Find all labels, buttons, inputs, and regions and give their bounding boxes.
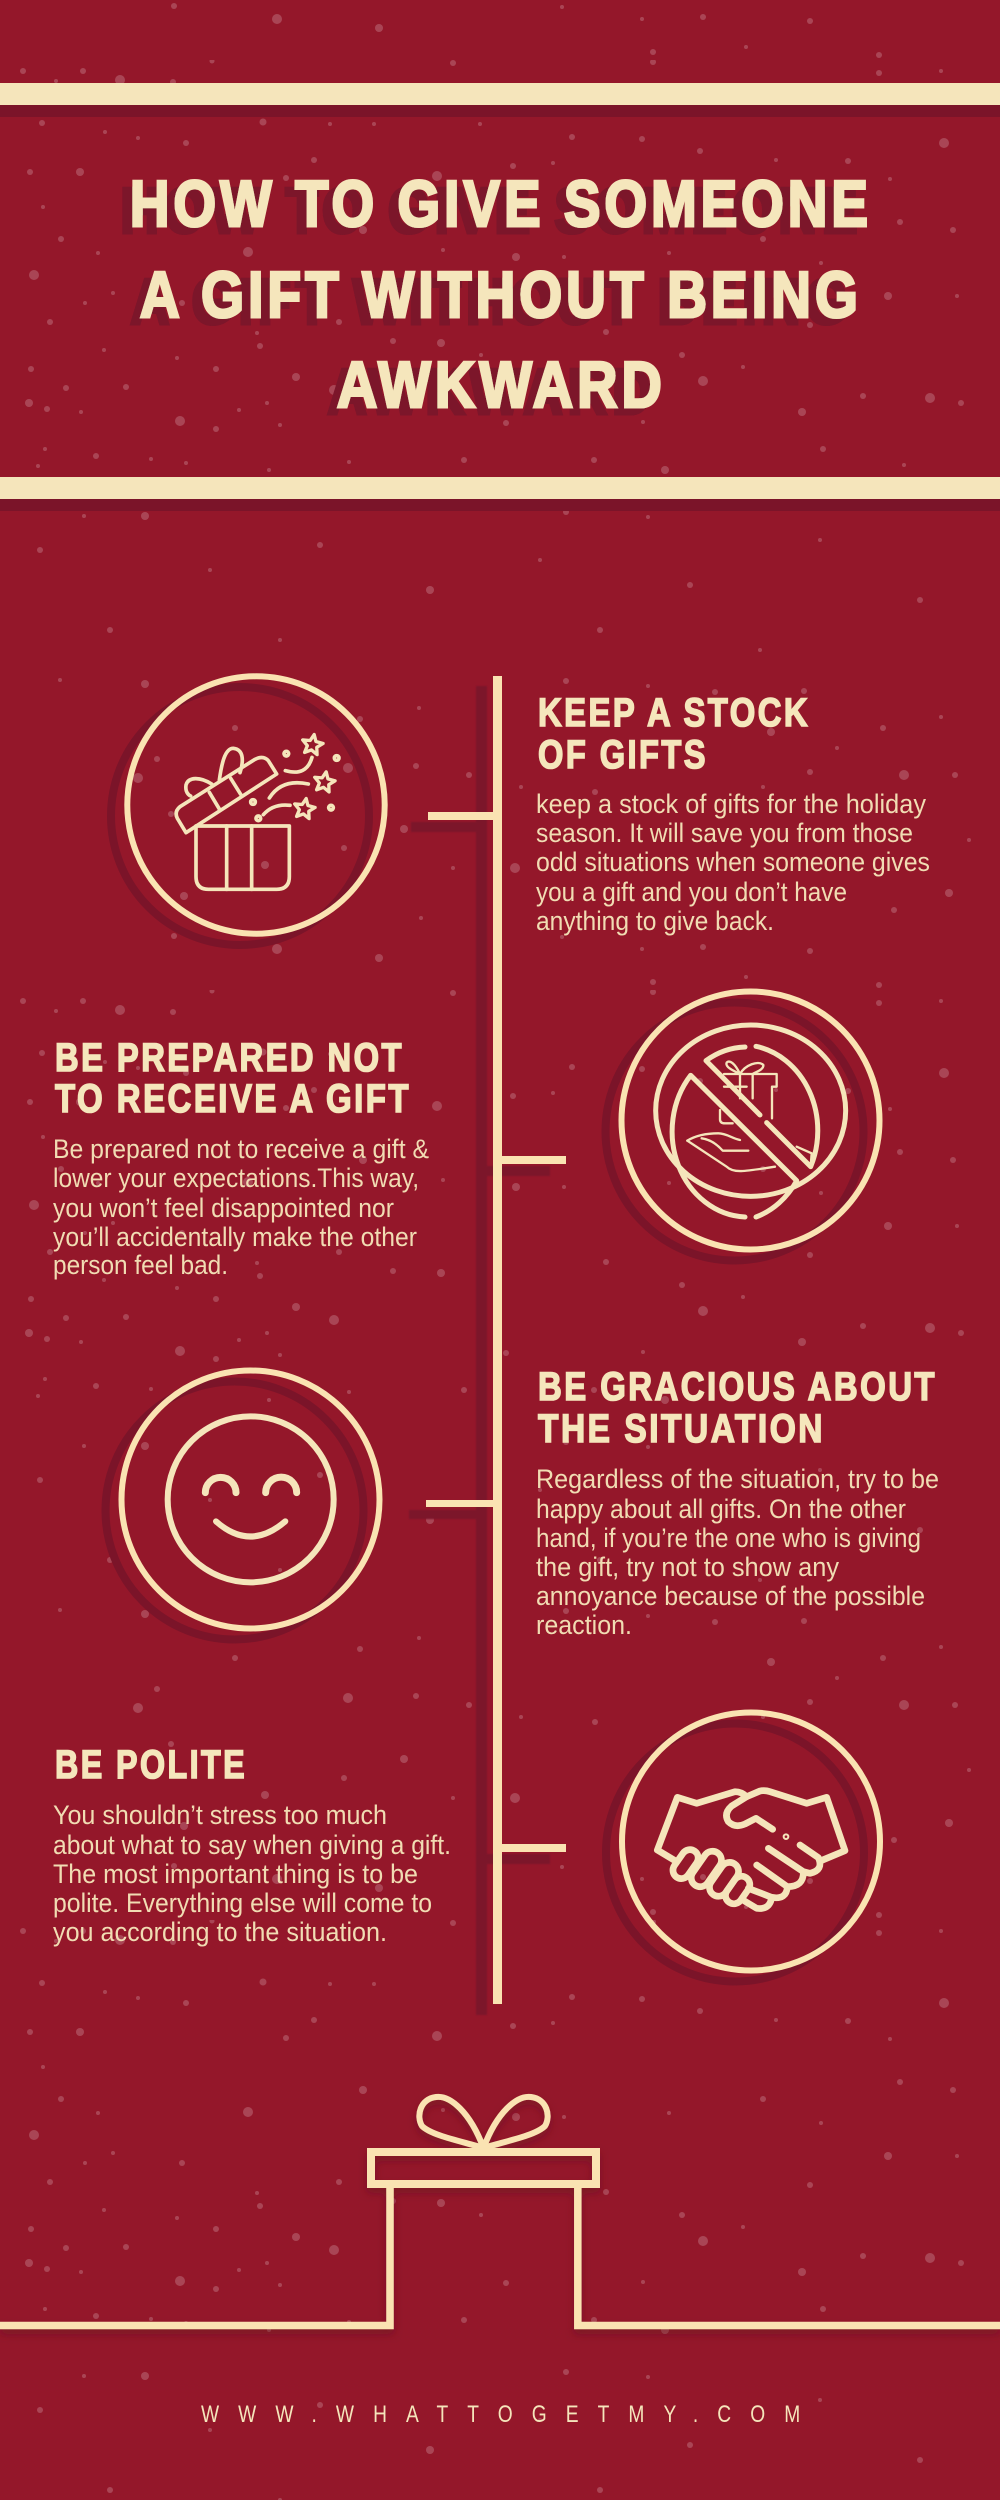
body text 1: season. It will save you from those (536, 818, 913, 848)
body text 1: odd situations when someone gives (536, 847, 930, 877)
icon: smiling face (106, 1370, 380, 1640)
body text 2 (53, 1134, 429, 1280)
step 1 text (536, 691, 930, 936)
heading: be polite: BE POLITE (55, 1743, 247, 1787)
body text 1 (536, 789, 930, 936)
tick 2 (502, 1156, 566, 1164)
body text 4: you according to the situation. (53, 1917, 387, 1947)
tick 1 (428, 812, 493, 820)
body text 4: You shouldn’t stress too much (53, 1800, 387, 1830)
vertical line (493, 676, 502, 2004)
body text 1: you a gift and you don’t have (536, 877, 847, 907)
title: A GIFT WITHOUT BEING (140, 258, 862, 331)
body text 2: lower your expectations.This way, (53, 1163, 419, 1193)
body text 2: person feel bad. (53, 1250, 228, 1280)
heading: keep a stock of gifts: KEEP A STOCK (538, 691, 810, 735)
gift outline at bottom (0, 2097, 1000, 2326)
step 4 text (53, 1743, 451, 1947)
body text 3: hand, if you’re the one who is giving (536, 1523, 921, 1553)
tick 4 (502, 1844, 566, 1852)
tick 3 (426, 1500, 493, 1507)
heading: be gracious about the situation: THE SITUATION (538, 1407, 825, 1451)
body text 2: Be prepared not to receive a gift & (53, 1134, 429, 1164)
body text 3: happy about all gifts. On the other (536, 1494, 906, 1524)
body text 3 (536, 1464, 939, 1640)
heading: keep a stock of gifts (538, 691, 810, 777)
body text 1: keep a stock of gifts for the holiday (536, 789, 927, 819)
icon: handshake (606, 1712, 880, 1982)
body text 2: you’ll accidentally make the other (53, 1222, 417, 1252)
website url: WWW.WHATTOGETMY.COM (201, 2400, 800, 2428)
body text 2: you won’t feel disappointed nor (53, 1193, 394, 1223)
timeline (409, 676, 566, 2015)
body text 3: annoyance because of the possible (536, 1581, 925, 1611)
heading: be prepared not to receive a gift: TO RECEIVE A GIFT (55, 1077, 411, 1121)
body text 4: The most important thing is to be (53, 1859, 418, 1889)
body text 3: Regardless of the situation, try to be (536, 1464, 939, 1494)
heading: keep a stock of gifts: OF GIFTS (538, 733, 708, 777)
heading: be prepared not to receive a gift: BE PREPARED NOT (55, 1036, 404, 1080)
top band (0, 83, 1000, 117)
body text 4: polite. Everything else will come to (53, 1888, 432, 1918)
step 2 text (53, 1036, 429, 1280)
title: HOW TO GIVE SOMEONE (130, 167, 872, 240)
icon: no gift in hand (606, 992, 880, 1260)
heading: be prepared not to receive a gift (55, 1036, 411, 1121)
icon: open gift box (111, 676, 385, 945)
body text 1: anything to give back. (536, 906, 774, 936)
title: AWKWARD (337, 348, 666, 421)
bottom header band (0, 477, 1000, 511)
body text 3: the gift, try not to show any (536, 1552, 840, 1582)
body text 4 (53, 1800, 451, 1947)
body text 4: about what to say when giving a gift. (53, 1830, 451, 1860)
heading: be gracious about the situation (538, 1365, 937, 1451)
title (130, 167, 872, 421)
step 3 text (536, 1365, 939, 1640)
body text 3: reaction. (536, 1610, 632, 1640)
